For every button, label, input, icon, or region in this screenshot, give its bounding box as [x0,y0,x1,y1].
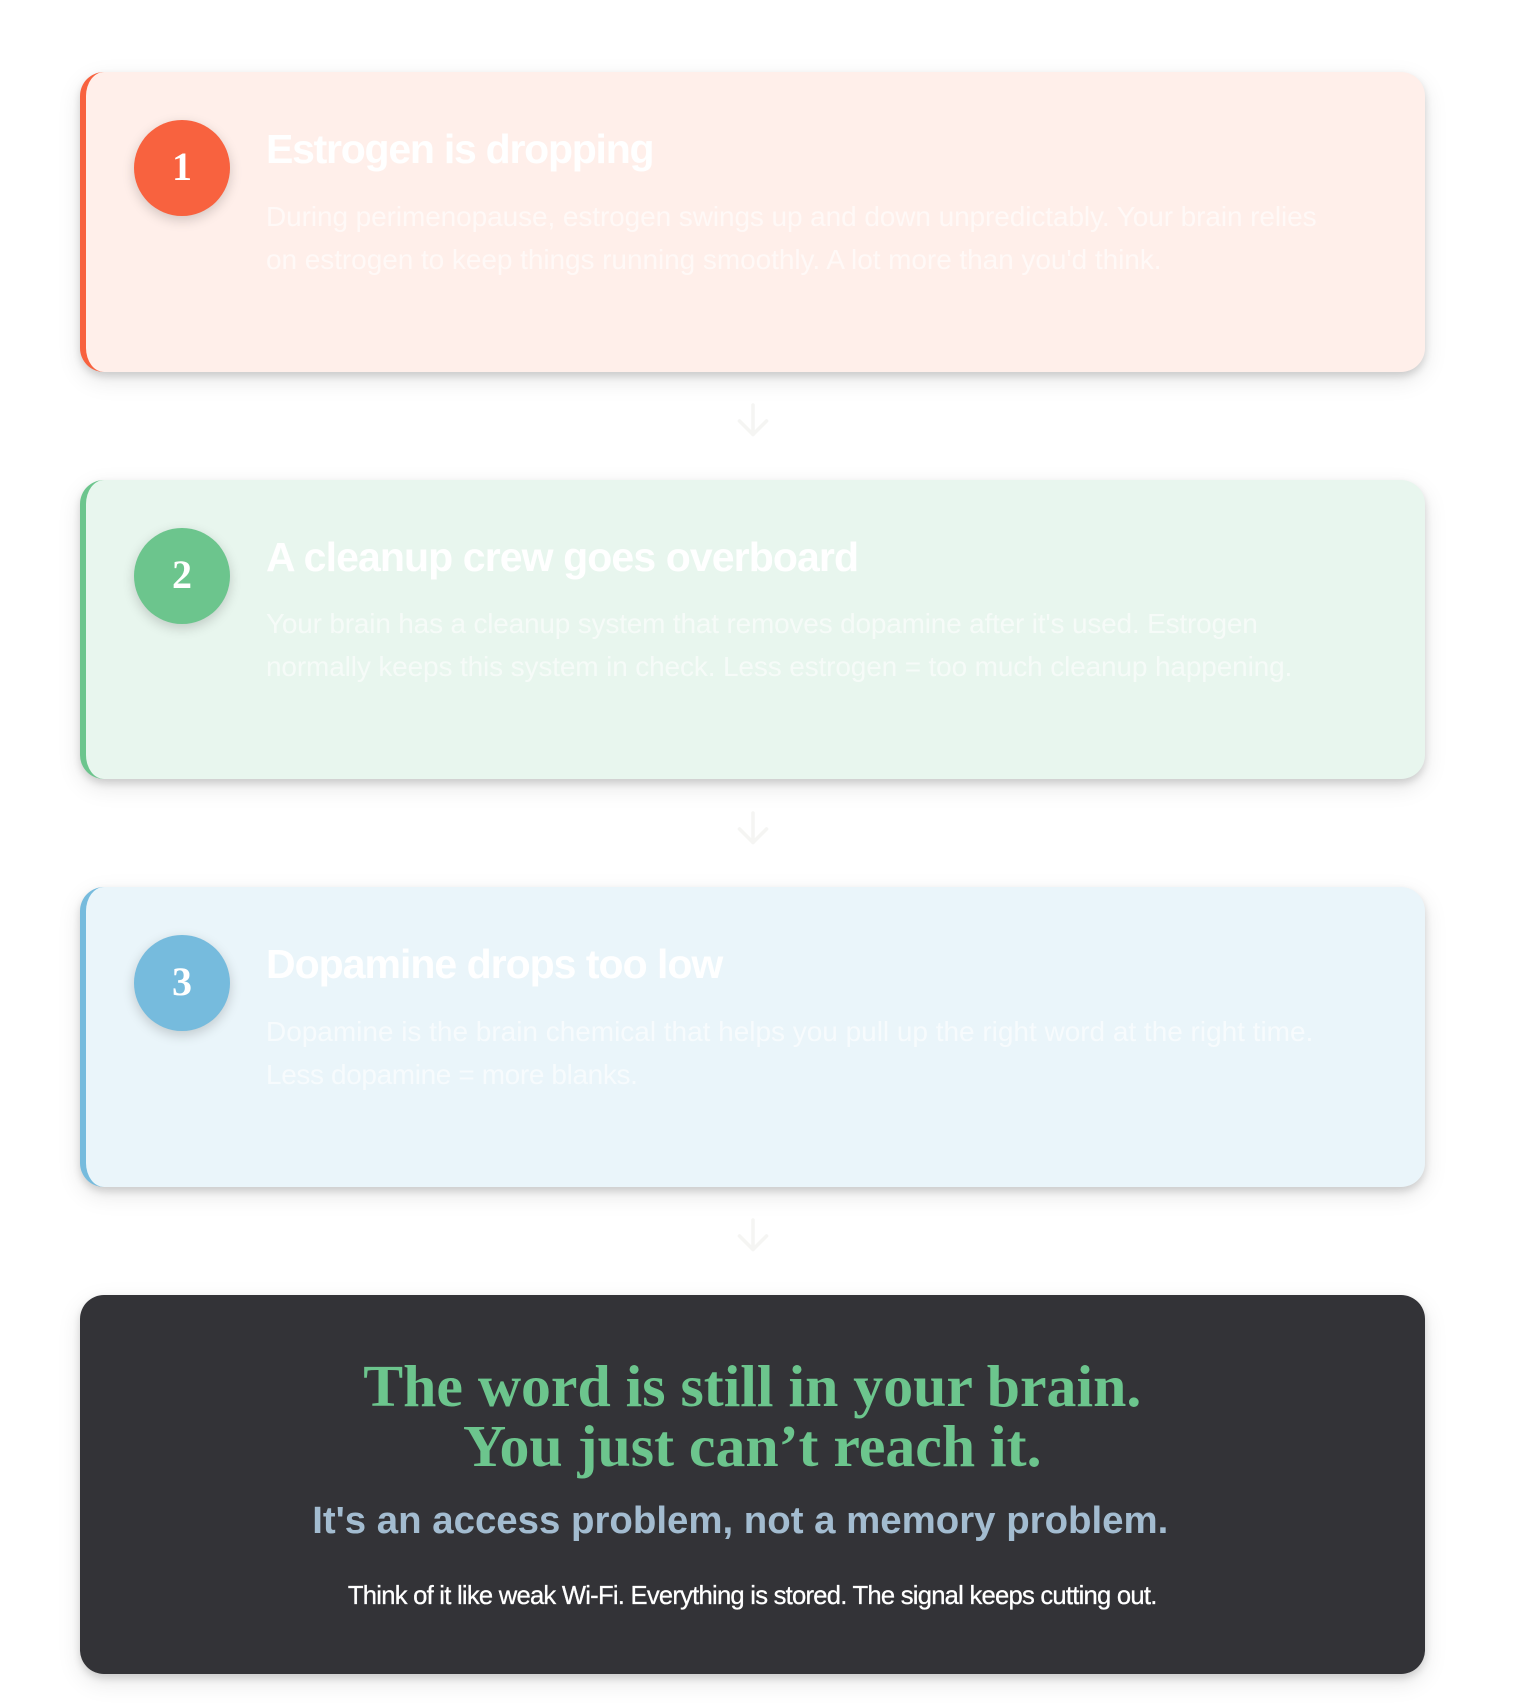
panel: conclusion [80,1294,1424,1674]
panel: step 1 [80,72,1424,372]
number badge 3: 3 [172,959,192,1004]
heading: step 1: Estrogen is dropping [266,126,653,172]
body text: step 1 [266,200,1317,275]
panel: step 3 [80,887,1424,1186]
body text: step 2 [266,608,1292,682]
arrow 1 [738,404,768,436]
heading: step 2: A cleanup crew goes overboard [266,534,858,580]
number badge 1: 1 [172,144,192,189]
arrow 2 [738,812,768,844]
body text: step 3 [266,1016,1313,1090]
arrow 3 [738,1218,768,1251]
conclusion body: Think of it like weak Wi-Fi. Everything is stored. The signal keeps cutting out. [348,1582,1157,1610]
number badge 2 [134,528,230,624]
body text: step 1: on estrogen to keep things running smoothly. A lot more than you'd think. [266,244,1161,275]
number badge 1 [134,120,230,216]
conclusion headline: The word is still in your brain. [363,1352,1141,1418]
conclusion headline: You just can’t reach it. [463,1413,1042,1479]
heading: step 3: Dopamine drops too low [266,941,722,987]
panel: step 2 [80,480,1424,779]
body text: step 1: During perimenopause, estrogen swings up and down unpredictably. Your brain relies [266,200,1317,232]
body text: step 2: normally keeps this system in check. Less estrogen = too much cleanup happening. [266,651,1292,682]
conclusion subheading: It's an access problem, not a memory problem. [312,1499,1168,1542]
body text: step 3: Less dopamine = more blanks. [266,1059,637,1090]
number badge 2: 2 [172,552,192,596]
conclusion headline [363,1352,1141,1479]
body text: step 2: Your brain has a cleanup system that removes dopamine after it's used. Estrogen [266,608,1258,639]
body text: step 3: Dopamine is the brain chemical that helps you pull up the right word at the right time. [266,1016,1313,1046]
number badge 3 [134,935,230,1031]
